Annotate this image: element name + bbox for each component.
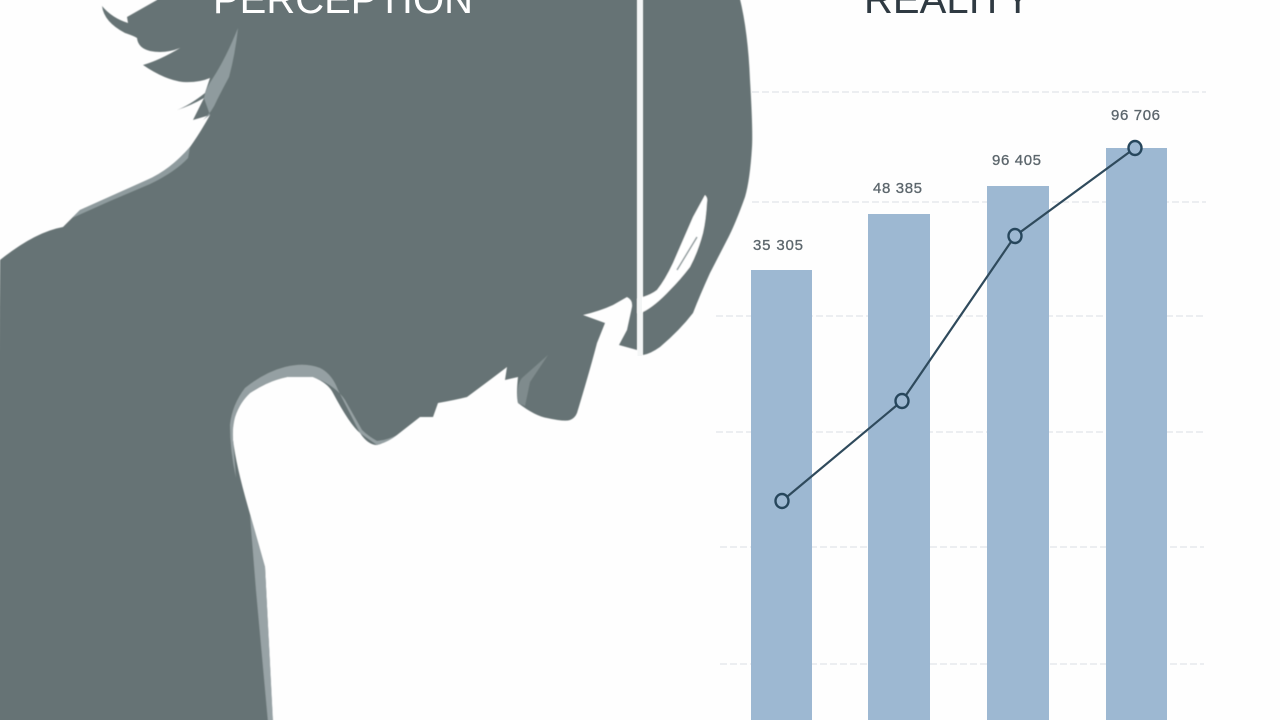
- bar label 2: 48 385: [873, 180, 922, 197]
- central divider line: [638, 0, 642, 356]
- bar 3: [987, 186, 1049, 720]
- ear inner line: [677, 237, 697, 270]
- neck highlight: [230, 365, 397, 478]
- bar 2: [868, 214, 930, 720]
- hair highlight stripe: [203, 28, 238, 120]
- silhouette: head in profile: [0, 0, 752, 720]
- ear cutout: [637, 195, 707, 313]
- silhouette: head and shoulders body: [0, 0, 637, 720]
- bar chart: [751, 107, 1167, 720]
- throat highlight: [250, 515, 273, 720]
- bar 4: [1106, 148, 1167, 720]
- trend line: [776, 141, 1142, 508]
- shoulder highlight: [72, 147, 190, 218]
- data point 1: [776, 494, 788, 508]
- bar label 1: 35 305: [753, 237, 803, 254]
- data point 3: [1008, 229, 1022, 243]
- bar 1: [751, 270, 812, 720]
- chin highlight: [518, 355, 548, 406]
- silhouette: right side of hair: [643, 0, 752, 355]
- data point 2: [896, 394, 908, 408]
- bar label 4: 96 706: [1111, 107, 1160, 124]
- data point 4: [1128, 141, 1142, 155]
- bar label 3: 96 405: [992, 152, 1041, 169]
